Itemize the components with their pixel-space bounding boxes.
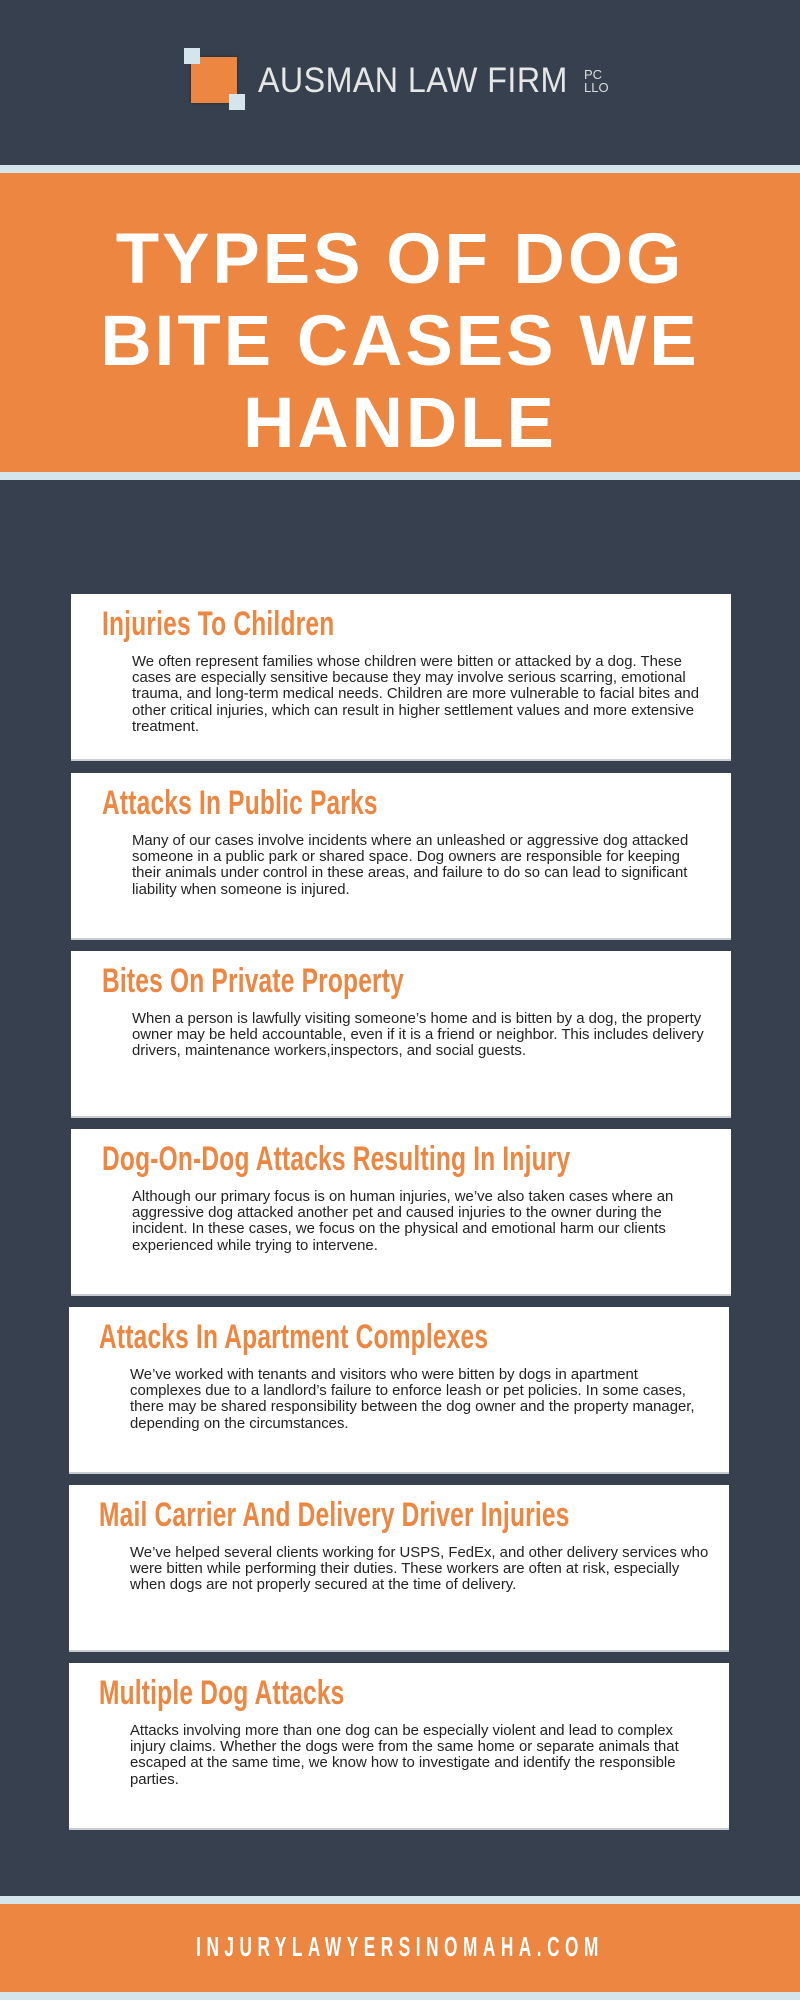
panel: injuries to children [71, 594, 731, 761]
panel: multiple dogs: escaped at the same time, we know how to investigate and identify the responsible [130, 1755, 675, 1771]
logo suffix: PC [584, 67, 602, 82]
panel: private property [71, 951, 731, 1118]
panel: multiple dogs [69, 1663, 729, 1830]
panel: apartment complexes [69, 1307, 729, 1474]
panel: mail carrier: were bitten while performing their duties. These workers are often at risk, especially [130, 1561, 679, 1577]
header [0, 0, 800, 165]
panel: dog-on-dog: aggressive dog attacked another pet and caused injuries to the owner during the [132, 1205, 662, 1221]
panel: injuries to children: treatment. [132, 719, 199, 735]
logo [184, 48, 609, 110]
panel: dog-on-dog: Dog-On-Dog Attacks Resulting In Injury [102, 1140, 570, 1178]
panel: public parks: Attacks In Public Parks [102, 784, 378, 822]
title: TYPES OF DOG [116, 220, 684, 299]
panel: mail carrier: We’ve helped several clients working for USPS, FedEx, and other delivery services who [130, 1545, 708, 1561]
panel: mail carrier: Mail Carrier And Delivery Driver Injuries [99, 1496, 570, 1534]
panel: apartment complexes: Attacks In Apartment Complexes [99, 1318, 488, 1356]
panel: private property: drivers, maintenance workers,inspectors, and social guests. [132, 1043, 526, 1059]
logo text: AUSMAN LAW FIRM [258, 61, 568, 100]
logo suffix [584, 67, 609, 95]
panel: apartment complexes: depending on the circumstances. [130, 1416, 349, 1432]
panel: public parks: someone in a public park or shared space. Dog owners are responsible for keeping [132, 849, 680, 865]
panel: injuries to children: Injuries To Children [102, 605, 334, 643]
panel: dog-on-dog [71, 1129, 731, 1296]
panel: dog-on-dog: experienced while trying to intervene. [132, 1238, 378, 1254]
panel: public parks: their animals under control in these areas, and failure to do so can lead to significant [132, 865, 687, 881]
panel: multiple dogs: Multiple Dog Attacks [99, 1674, 345, 1712]
panel: apartment complexes: there may be shared responsibility between the dog owner and the property manager, [130, 1399, 695, 1415]
panel: multiple dogs: parties. [130, 1772, 179, 1788]
panel: injuries to children: trauma, and long-term medical needs. Children are more vulnerable to facial bites and [132, 686, 699, 702]
panel: public parks: Many of our cases involve incidents where an unleashed or aggressive dog attacked [132, 833, 688, 849]
title [100, 220, 700, 463]
panel: apartment complexes: complexes due to a landlord’s failure to enforce leash or pet policies. In some cases, [130, 1383, 686, 1399]
panel: apartment complexes: We’ve worked with tenants and visitors who were bitten by dogs in apartment [130, 1367, 638, 1383]
panel: private property: When a person is lawfully visiting someone’s home and is bitten by a dog, the property [132, 1011, 701, 1027]
panel: dog-on-dog: incident. In these cases, we focus on the physical and emotional harm our clients [132, 1221, 666, 1237]
panel: private property: owner may be held accountable, even if it is a friend or neighbor. This includes delivery [132, 1027, 704, 1043]
panel: injuries to children: We often represent families whose children were bitten or attacked by a dog. These [132, 654, 682, 670]
panel: injuries to children: cases are especially sensitive because they may involve serious scarring, emotional [132, 670, 686, 686]
panel: dog-on-dog: Although our primary focus is on human injuries, we’ve also taken cases where an [132, 1189, 673, 1205]
panel: mail carrier: when dogs are not properly secured at the time of delivery. [130, 1577, 516, 1593]
title: HANDLE [243, 384, 557, 463]
panel: multiple dogs: Attacks involving more than one dog can be especially violent and lead to complex [130, 1723, 673, 1739]
panel: mail carrier [69, 1485, 729, 1652]
logo suffix: LLO [584, 80, 609, 95]
panel: injuries to children: other critical injuries, which can result in higher settlement values and more extensive [132, 703, 694, 719]
panel: public parks: liability when someone is injured. [132, 882, 350, 898]
footer url: INJURYLAWYERSINOMAHA.COM [196, 1931, 604, 1962]
panel: private property: Bites On Private Property [102, 962, 404, 1000]
panel: public parks [71, 773, 731, 940]
panel: multiple dogs: injury claims. Whether the dogs were from the same home or separate animals that [130, 1739, 679, 1755]
title band [0, 173, 800, 472]
footer [0, 1904, 800, 1992]
icon: logo squares [184, 48, 245, 110]
title: BITE CASES WE [100, 302, 700, 381]
